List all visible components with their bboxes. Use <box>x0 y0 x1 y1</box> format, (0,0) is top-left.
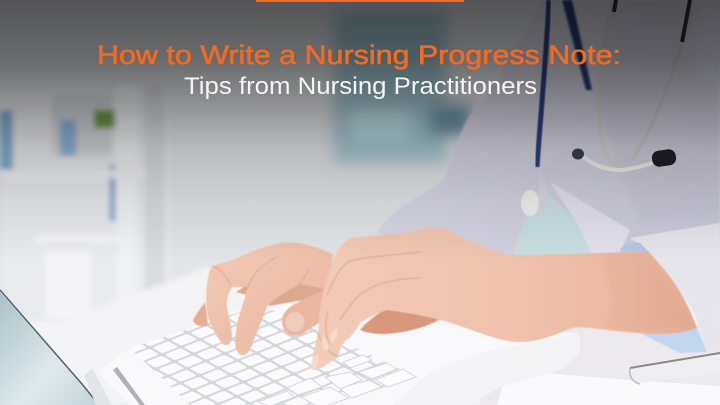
badge pendant <box>521 168 548 224</box>
background: blurred shelves <box>0 85 170 320</box>
left hand <box>193 242 333 355</box>
keyboard slot <box>113 367 145 405</box>
ring nail <box>329 327 339 343</box>
finger creases <box>318 252 420 356</box>
lanyard <box>537 0 549 167</box>
laptop <box>0 290 112 405</box>
collar dark strap <box>562 0 592 90</box>
title: How to Write a Nursing Progress Note: <box>97 40 621 70</box>
front nail <box>310 354 320 370</box>
middle nail <box>320 336 330 352</box>
stethoscope ear tip right <box>651 148 677 168</box>
left thumb <box>282 289 330 336</box>
stethoscope <box>572 0 692 170</box>
top orange bar <box>256 0 464 2</box>
large keys <box>258 355 416 405</box>
upper shirt cuff <box>620 242 650 253</box>
web shadow <box>236 278 330 306</box>
stethoscope ear tip left <box>572 148 584 160</box>
right desk tone <box>480 325 720 405</box>
open collar teal shirt area <box>512 190 592 255</box>
keyboard body <box>97 300 580 405</box>
coat shadow folds <box>595 0 720 225</box>
wrist shading <box>600 254 692 330</box>
left hand back and fingers <box>206 242 333 355</box>
finger creases <box>212 257 308 287</box>
coat lapel <box>550 182 630 255</box>
subtitle: Tips from Nursing Practitioners <box>184 73 537 100</box>
right coat sleeve <box>630 223 720 352</box>
under-palm shadow <box>360 308 442 334</box>
keyboard side face <box>392 333 580 405</box>
clipboard and paper <box>497 353 720 405</box>
doctor's white coat <box>377 0 720 262</box>
key field <box>130 305 416 405</box>
keyboard <box>97 300 580 405</box>
right hand <box>310 228 697 370</box>
thumb nail <box>283 309 307 335</box>
background: blurred teal picture <box>334 10 470 162</box>
desk surface <box>0 268 720 405</box>
left pinky <box>193 302 208 326</box>
lower shirt cuff <box>640 328 707 353</box>
right hand shape <box>312 228 697 370</box>
